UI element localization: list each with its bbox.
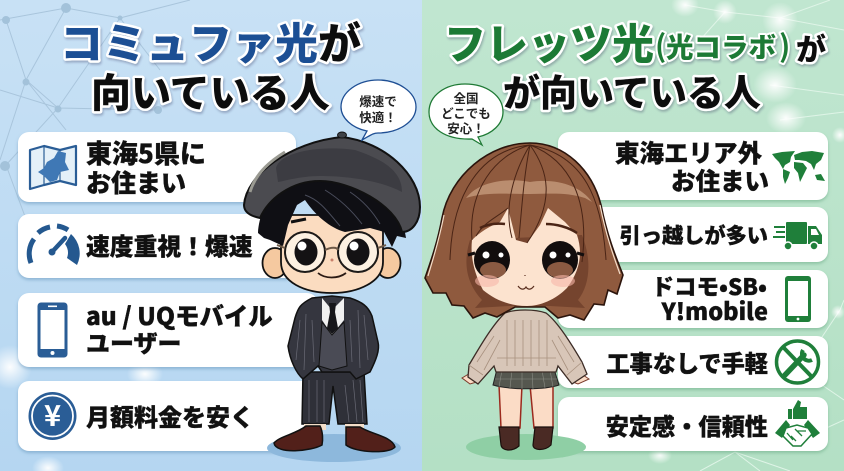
hair highlight and strands — [466, 180, 592, 202]
text — [651, 270, 768, 327]
face — [281, 215, 383, 293]
title: コミュファ光が向いている人 — [60, 10, 361, 119]
speech bubble: 全国どこでも安心！: 全国 — [453, 88, 479, 107]
text: お住まい — [86, 164, 186, 200]
jacket — [288, 296, 379, 379]
skirt — [493, 369, 559, 389]
text: 引っ越しが多い — [620, 219, 768, 250]
shoes — [274, 426, 323, 451]
icon: smartphone — [38, 302, 68, 358]
title: コミュファ光が向いている人: コミュファ光が — [60, 10, 361, 72]
shirt and tie — [322, 298, 344, 335]
beret — [244, 137, 420, 232]
text: 月額料金を安く — [86, 398, 254, 433]
card: 速度重視！爆速 — [18, 214, 296, 278]
mouth — [318, 273, 346, 278]
icon: yen coin: ¥ — [44, 393, 61, 435]
card: 安定感・信頼性 — [558, 397, 828, 451]
card: 東海エリア外お住まい — [558, 132, 828, 200]
text — [86, 134, 206, 200]
trousers — [302, 372, 367, 424]
eyes — [468, 241, 584, 279]
card: ドコモ・SB・Y!mobile — [558, 270, 828, 328]
card: 月額料金を安く — [18, 381, 318, 451]
text — [86, 298, 273, 359]
text: 東海エリア外 — [615, 135, 762, 170]
icon: no tools — [776, 341, 818, 383]
nose and mouth — [518, 275, 534, 289]
text: au / UQモバイル — [86, 298, 273, 333]
sweater — [468, 310, 587, 384]
card: 引っ越しが多い — [558, 207, 828, 262]
eyebrows — [480, 224, 577, 233]
face — [472, 208, 580, 306]
hands — [462, 372, 480, 384]
speech bubble: 全国どこでも安心！: どこでも — [441, 103, 491, 122]
title: フレッツ光（光コラボ）がが向いている人: フレッツ光 — [444, 11, 654, 72]
icon: thumbs up and handshake — [775, 400, 820, 446]
character: girl with brown bob hair — [425, 143, 623, 460]
icon: map — [30, 146, 76, 189]
icon: yen coin — [28, 392, 76, 440]
icon: truck — [773, 222, 822, 250]
card: 東海5県にお住まい — [18, 132, 296, 202]
ground shadow — [267, 434, 401, 462]
speech bubble: 全国どこでも安心！ — [429, 84, 503, 145]
text: ドコモ•SB• — [651, 270, 767, 302]
text: 速度重視！爆速 — [86, 227, 253, 262]
text: ユーザー — [86, 324, 182, 359]
text — [615, 135, 769, 198]
waistcoat — [319, 322, 347, 370]
speech bubble: 全国どこでも安心！: 安心！ — [447, 118, 485, 137]
text: 東海5県に — [86, 134, 206, 171]
panel: left background — [0, 0, 422, 471]
hair — [425, 143, 623, 320]
character: boy in suit and beret — [244, 132, 420, 462]
left eyebrow — [291, 219, 306, 222]
hair — [258, 165, 406, 247]
title: フレッツ光（光コラボ）がが向いている人: 光コラボ — [666, 25, 776, 65]
nose — [330, 258, 334, 262]
title: コミュファ光が向いている人: 向いている人 — [91, 61, 330, 119]
title: フレッツ光（光コラボ）がが向いている人: ( — [655, 22, 666, 66]
icon: smartphone — [785, 276, 811, 322]
legs — [499, 385, 522, 428]
boots — [499, 427, 519, 450]
text: 工事なしで手軽 — [606, 345, 768, 379]
socks — [304, 424, 364, 431]
text: Y!mobile — [660, 293, 768, 327]
ears — [262, 248, 288, 278]
text: お住まい — [671, 163, 769, 198]
title: フレッツ光（光コラボ）がが向いている人 — [444, 11, 826, 117]
icon: speedometer — [29, 226, 80, 265]
panel: right background — [422, 0, 844, 471]
title: フレッツ光（光コラボ）がが向いている人: ) — [779, 22, 790, 66]
speech bubble: 爆速で快適！: 快適！ — [359, 107, 397, 126]
glasses and eyes — [277, 232, 386, 272]
card: au / UQモバイル ユーザー — [18, 293, 318, 367]
speech bubble: 爆速で快適！ — [341, 80, 416, 140]
card: 工事なしで手軽 — [558, 336, 828, 388]
title: フレッツ光（光コラボ）がが向いている人: が向いている人 — [503, 63, 761, 117]
ground shadow — [466, 434, 586, 460]
speech bubble: 爆速で快適！: 爆速で — [359, 91, 397, 110]
text: 安定感・信頼性 — [606, 408, 768, 442]
hair shadow around face — [466, 235, 588, 308]
title: フレッツ光（光コラボ）がが向いている人: が — [796, 25, 826, 69]
icon: world map — [772, 151, 825, 184]
cheeks — [475, 275, 575, 287]
